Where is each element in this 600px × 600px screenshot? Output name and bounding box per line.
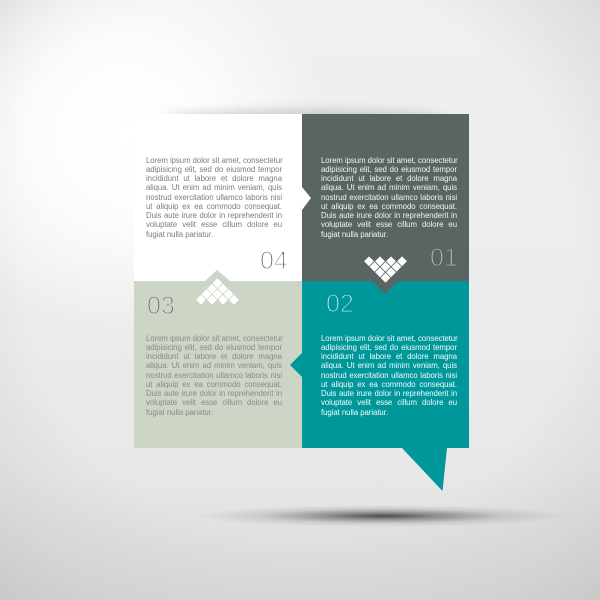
text block: sage panel: aliqua. Ut enim ad minim veniam, quis	[146, 361, 282, 370]
text block: dark panel	[321, 156, 458, 238]
text block: white panel: fugiat nulla pariatur.	[146, 230, 213, 238]
text block: sage panel: nostrud exercitation ullamco laboris nisi	[146, 370, 282, 380]
arrow: dark pointer	[372, 281, 398, 294]
text block: teal panel: adipisicing elit, sed do eiusmod tempor	[321, 343, 457, 352]
number 02: 02	[326, 290, 354, 318]
arrow: sage pointer	[205, 270, 230, 281]
panel: sage 03	[134, 281, 302, 448]
text block: white panel: voluptate velit esse cillum dolore eu	[146, 220, 282, 229]
text block: teal panel: Lorem ipsum dolor sit amet, consectetur	[321, 334, 458, 342]
arrow: white pointer	[302, 187, 311, 210]
text block: dark panel: voluptate velit esse cillum dolore eu	[321, 220, 457, 229]
text block: sage panel: Lorem ipsum dolor sit amet, consectetur	[146, 334, 283, 342]
text block: teal panel: Duis aute irure dolor in reprehenderit in	[321, 389, 457, 398]
text block: teal panel: nostrud exercitation ullamco laboris nisi	[321, 370, 457, 380]
text block: dark panel: Duis aute irure dolor in reprehenderit in	[321, 211, 457, 220]
background shadow above the panel	[165, 110, 445, 126]
text block: sage panel: adipisicing elit, sed do eiusmod tempor	[146, 343, 282, 352]
text block: white panel: aliqua. Ut enim ad minim veniam, quis	[146, 183, 282, 192]
text block: sage panel: Duis aute irure dolor in reprehenderit in	[146, 389, 282, 398]
text block: dark panel: incididunt ut labore et dolore magna	[321, 174, 457, 183]
text block: teal panel	[321, 334, 458, 416]
panel: teal 02 with tail	[302, 281, 469, 491]
floor shadow	[196, 505, 570, 527]
text block: white panel: ut aliquip ex ea commodo consequat.	[146, 202, 282, 211]
icon: white diamonds in sage panel	[196, 278, 239, 305]
text block: teal panel: incididunt ut labore et dolore magna	[321, 352, 457, 361]
arrow: teal pointer	[290, 353, 302, 377]
text block: dark panel: nostrud exercitation ullamco laboris nisi	[321, 192, 457, 202]
text block: teal panel: ut aliquip ex ea commodo consequat.	[321, 380, 457, 389]
text block: dark panel: Lorem ipsum dolor sit amet, consectetur	[321, 156, 458, 164]
text block: sage panel: ut aliquip ex ea commodo consequat.	[146, 380, 282, 389]
text block: dark panel: aliqua. Ut enim ad minim veniam, quis	[321, 183, 457, 192]
text block: dark panel: fugiat nulla pariatur.	[321, 230, 388, 238]
number 04: 04	[260, 247, 288, 275]
text block: white panel: adipisicing elit, sed do eiusmod tempor	[146, 165, 282, 174]
text block: white panel: Duis aute irure dolor in reprehenderit in	[146, 211, 282, 220]
text block: dark panel: adipisicing elit, sed do eiusmod tempor	[321, 165, 457, 174]
icon: white diamonds in dark panel	[364, 256, 407, 283]
panel: dark 01	[302, 114, 469, 281]
text block: teal panel: aliqua. Ut enim ad minim veniam, quis	[321, 361, 457, 370]
text block: sage panel: voluptate velit esse cillum dolore eu	[146, 398, 282, 407]
text block: sage panel: incididunt ut labore et dolore magna	[146, 352, 282, 361]
text block: white panel	[146, 156, 283, 238]
text block: sage panel	[146, 334, 283, 416]
text block: teal panel: fugiat nulla pariatur.	[321, 408, 388, 416]
text block: dark panel: ut aliquip ex ea commodo consequat.	[321, 202, 457, 211]
number 03: 03	[147, 292, 175, 320]
text block: white panel: nostrud exercitation ullamco laboris nisi	[146, 192, 282, 202]
number 01: 01	[430, 244, 458, 272]
text block: white panel: incididunt ut labore et dolore magna	[146, 174, 282, 183]
text block: sage panel: fugiat nulla pariatur.	[146, 408, 213, 416]
text block: white panel: Lorem ipsum dolor sit amet, consectetur	[146, 156, 283, 164]
panel: white 04	[134, 114, 302, 281]
text block: teal panel: voluptate velit esse cillum dolore eu	[321, 398, 457, 407]
